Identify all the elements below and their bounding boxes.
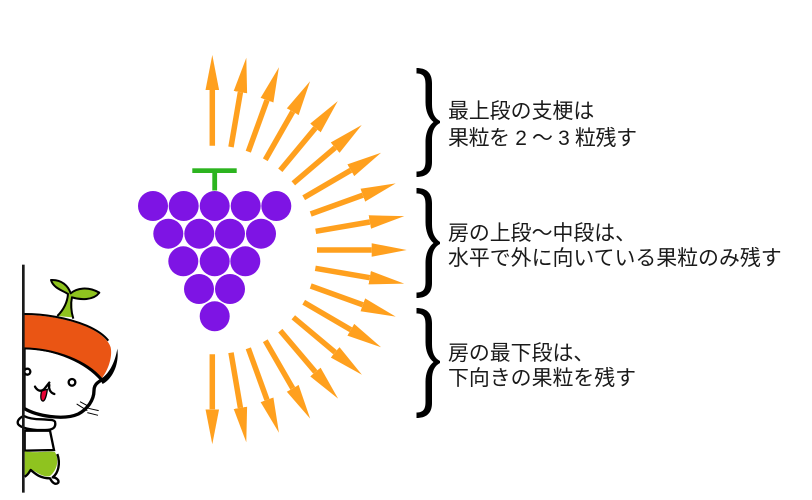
mascot right eye: [69, 379, 75, 386]
text: bottom section note: 房の最下段は、: [448, 342, 594, 365]
mascot green leg: [25, 451, 57, 476]
text: top section note: 果粒を 2 〜 3 粒残す: [448, 127, 637, 150]
mascot leg outline and foot: [25, 454, 59, 484]
brace: bottom section: [416, 308, 440, 418]
brace: top section: [416, 68, 440, 177]
brace: middle section: [416, 188, 440, 298]
icon: grape bunch: [138, 191, 291, 331]
mascot orange hat: [24, 315, 111, 378]
text: middle section note: 房の上段〜中段は、: [448, 222, 636, 245]
mascot: character peeking from behind a line: [18, 265, 118, 493]
mascot left eye: [24, 369, 30, 375]
icon: grape bunch stem: [192, 168, 237, 190]
mascot vertical wall line: [22, 265, 25, 493]
mascot hat outline: [24, 314, 108, 379]
text: middle section note: [448, 222, 782, 270]
text: middle section note: 水平で外に向いている果粒のみ残す: [448, 247, 782, 270]
text: top section note: 最上段の支梗は: [448, 100, 594, 123]
arrows: radiating outward from the bunch: [212, 90, 372, 409]
mascot arm and collar: [18, 416, 55, 430]
mascot whiskers: [77, 402, 99, 415]
text: bottom section note: 下向きの果粒を残す: [448, 367, 636, 390]
mascot ear crescent: [100, 349, 118, 384]
mascot body: [25, 431, 54, 451]
mascot tongue and mouth: [35, 383, 54, 401]
text: bottom section note: [448, 342, 636, 390]
mascot face: [24, 347, 102, 417]
mascot leaf sprout: [51, 280, 99, 319]
text: top section note: [448, 100, 637, 150]
